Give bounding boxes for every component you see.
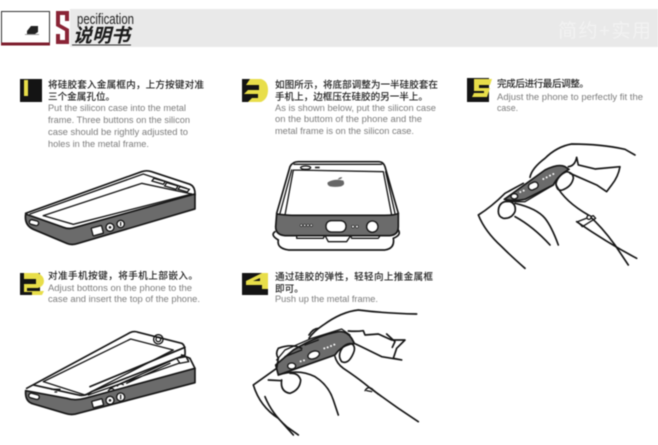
- step 3 text: on the buttom of the phone and the: [275, 114, 422, 124]
- step 1: [20, 79, 204, 244]
- step 2 text: case and insert the top of the phone.: [48, 294, 200, 304]
- icon: number 5: [467, 78, 492, 102]
- step 4 text: 即可。: [275, 284, 304, 295]
- step 4 text: [275, 271, 433, 304]
- illustration: hands adjusting the phone in case: [478, 144, 637, 268]
- step 5 text: case.: [497, 103, 518, 113]
- icon: number 1: [20, 79, 42, 102]
- header band: [1, 9, 658, 47]
- step 2 text: 对准手机按键，将手机上部嵌入。: [48, 270, 198, 282]
- illustration: metal frame with silicon case: [25, 171, 195, 244]
- step 4 text: Push up the metal frame.: [275, 294, 378, 304]
- step 1 text: [48, 79, 204, 149]
- step 3 text: [275, 79, 438, 136]
- step 2 text: Adjust bottons on the phone to the: [48, 283, 192, 293]
- step 4: [242, 271, 433, 435]
- icon: number 4: [242, 273, 268, 295]
- step 3 text: 手机上，边框压在硅胶的另一半上。: [275, 91, 428, 103]
- icon: number 2: [20, 273, 44, 295]
- step 1 text: 三个金属孔位。: [48, 91, 115, 103]
- step 2: [20, 270, 200, 414]
- heading letter S: [56, 11, 69, 44]
- step 3 text: As is shown below, put the silicon case: [275, 103, 436, 113]
- step 1 text: holes in the metal frame.: [48, 139, 149, 149]
- illustration: phone inserted into case: [26, 332, 195, 414]
- step 3: [242, 79, 438, 250]
- step 4 text: 通过硅胶的弹性，轻轻向上推金属框: [275, 271, 433, 283]
- step 5 text: [497, 78, 643, 113]
- step 1 text: case should be rightly adjusted to: [48, 127, 188, 137]
- illustration: hands pushing up the metal frame: [253, 310, 418, 435]
- step 5 text: Adjust the phone to perfectly fit the: [497, 92, 643, 102]
- step 5 text: 完成后进行最后调整。: [497, 78, 589, 90]
- watermark slogan: 简约+实用: [558, 20, 651, 42]
- heading: 说明书: 说明书: [73, 25, 133, 47]
- icon: number 3: [242, 79, 268, 102]
- illustration: phone bottom half in case: [273, 162, 399, 250]
- step 1 text: frame. Three buttons on the silicon: [48, 115, 190, 125]
- heading: Specification: pecification: [77, 11, 134, 28]
- step 2 text: [48, 270, 200, 304]
- step 3 text: metal frame is on the silicon case.: [275, 126, 414, 136]
- step 3 text: 如图所示，将底部调整为一半硅胶套在: [275, 79, 438, 91]
- step 1 text: 将硅胶套入金属框内，上方按键对准: [48, 79, 204, 91]
- step 1 text: Put the silicon case into the metal: [48, 103, 186, 113]
- logo box: [1, 12, 50, 46]
- step 5: [467, 78, 643, 268]
